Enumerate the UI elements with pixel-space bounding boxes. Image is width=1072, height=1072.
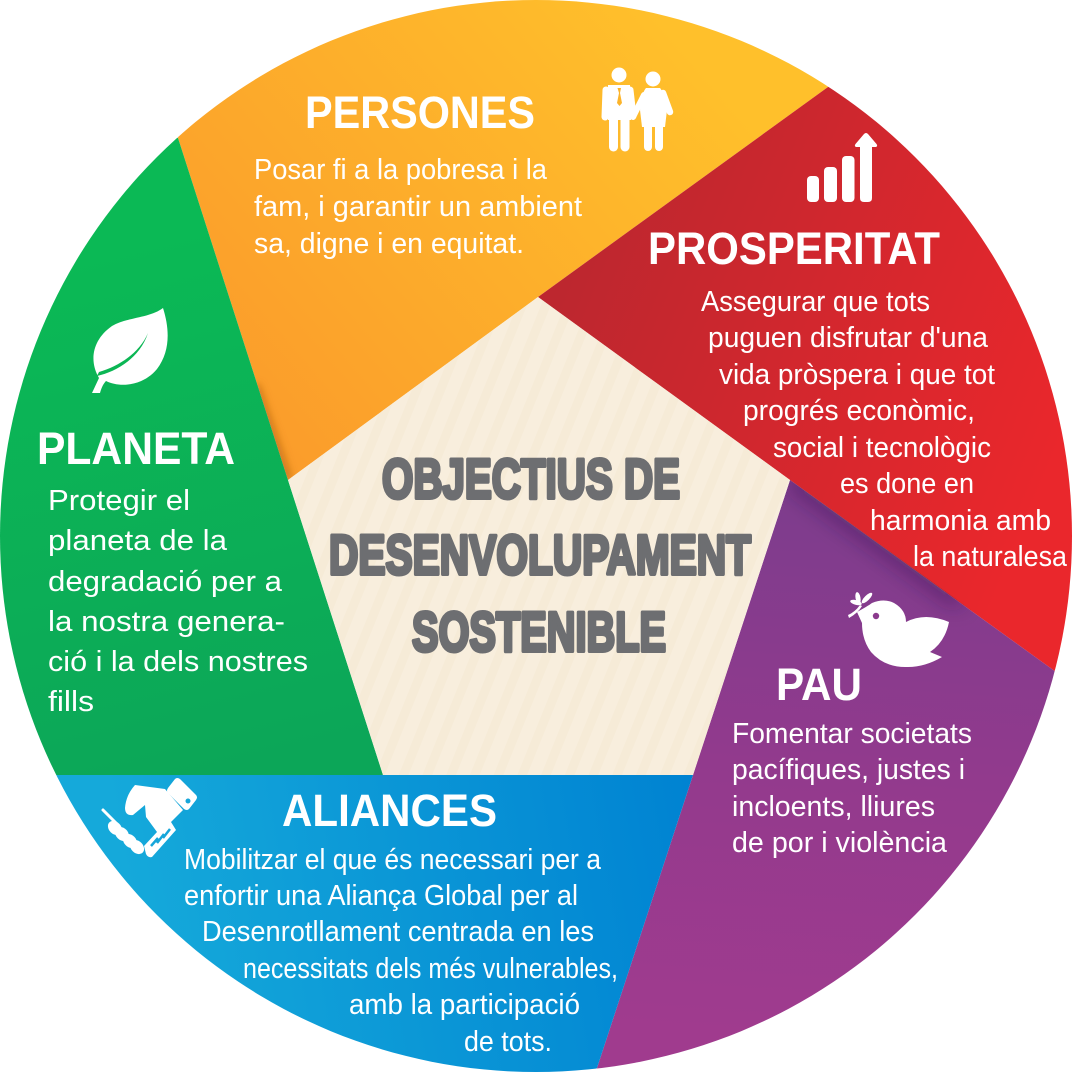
- panel: central pentagon: [288, 297, 790, 775]
- panel: pau sector: [590, 480, 1072, 1072]
- heading: prosperitat: PROSPERITAT: [648, 223, 940, 274]
- text: persones description: Posar fi a la pobresa i la: [254, 154, 548, 186]
- panel: persones sector: [178, 0, 828, 480]
- text: aliances description: amb la participació: [349, 989, 580, 1021]
- text: prosperitat description: vida pròspera i que tot: [719, 359, 995, 391]
- text: prosperitat description: progrés econòmic,: [743, 395, 975, 427]
- text: planeta description: fills: [48, 686, 94, 718]
- central title: SOSTENIBLE: [412, 600, 666, 663]
- text: planeta description: Protegir el: [48, 485, 190, 517]
- text: planeta description: la nostra genera-: [48, 606, 285, 638]
- text: aliances description: [184, 844, 618, 1058]
- text: persones description: sa, digne i en equitat.: [254, 228, 524, 260]
- central title: [329, 447, 751, 663]
- heading: aliances: ALIANCES: [282, 785, 497, 836]
- heading: persones: PERSONES: [305, 87, 535, 138]
- panel: prosperitat sector: [538, 40, 1072, 690]
- text: pau description: pacífiques, justes i: [732, 754, 965, 786]
- heading: planeta: PLANETA: [37, 423, 235, 474]
- text: prosperitat description: social i tecnològic: [773, 432, 991, 464]
- text: pau description: Fomentar societats: [732, 718, 972, 750]
- text: aliances description: necessitats dels més vulnerables,: [243, 953, 618, 985]
- text: planeta description: degradació per a: [48, 566, 283, 598]
- icon: handshake: [103, 778, 197, 857]
- text: prosperitat description: es done en: [840, 468, 974, 500]
- text: planeta description: [48, 485, 308, 718]
- text: prosperitat description: puguen disfrutar d'una: [708, 322, 989, 354]
- central title: DESENVOLUPAMENT: [329, 523, 751, 586]
- shadow: sector edges: [0, 385, 960, 775]
- text: aliances description: enfortir una Aliança Global per al: [184, 880, 578, 912]
- text: planeta description: ció i la dels nostres: [48, 646, 308, 678]
- text: planeta description: planeta de la: [48, 525, 228, 557]
- icon: dove with olive branch: [848, 591, 949, 667]
- text: aliances description: Mobilitzar el que és necessari per a: [184, 844, 602, 876]
- text: pau description: [732, 718, 972, 859]
- text: aliances description: Desenrotllament centrada en les: [202, 916, 594, 948]
- text: aliances description: de tots.: [464, 1026, 552, 1058]
- text: prosperitat description: [701, 286, 1068, 573]
- text: persones description: [254, 154, 582, 260]
- panel: planeta sector: [0, 80, 383, 775]
- text: persones description: fam, i garantir un ambient: [254, 191, 582, 223]
- heading: pau: PAU: [776, 659, 862, 710]
- icon: leaf: [92, 308, 168, 393]
- panel: aliances sector: [0, 775, 693, 1072]
- text: pau description: incloents, lliures: [732, 791, 935, 823]
- icon: couple: [605, 68, 670, 147]
- text: prosperitat description: Assegurar que tots: [701, 286, 930, 318]
- text: prosperitat description: harmonia amb: [870, 505, 1051, 537]
- central title: OBJECTIUS DE: [382, 447, 680, 510]
- icon: rising bars: [807, 133, 877, 202]
- text: pau description: de por i violència: [732, 827, 948, 859]
